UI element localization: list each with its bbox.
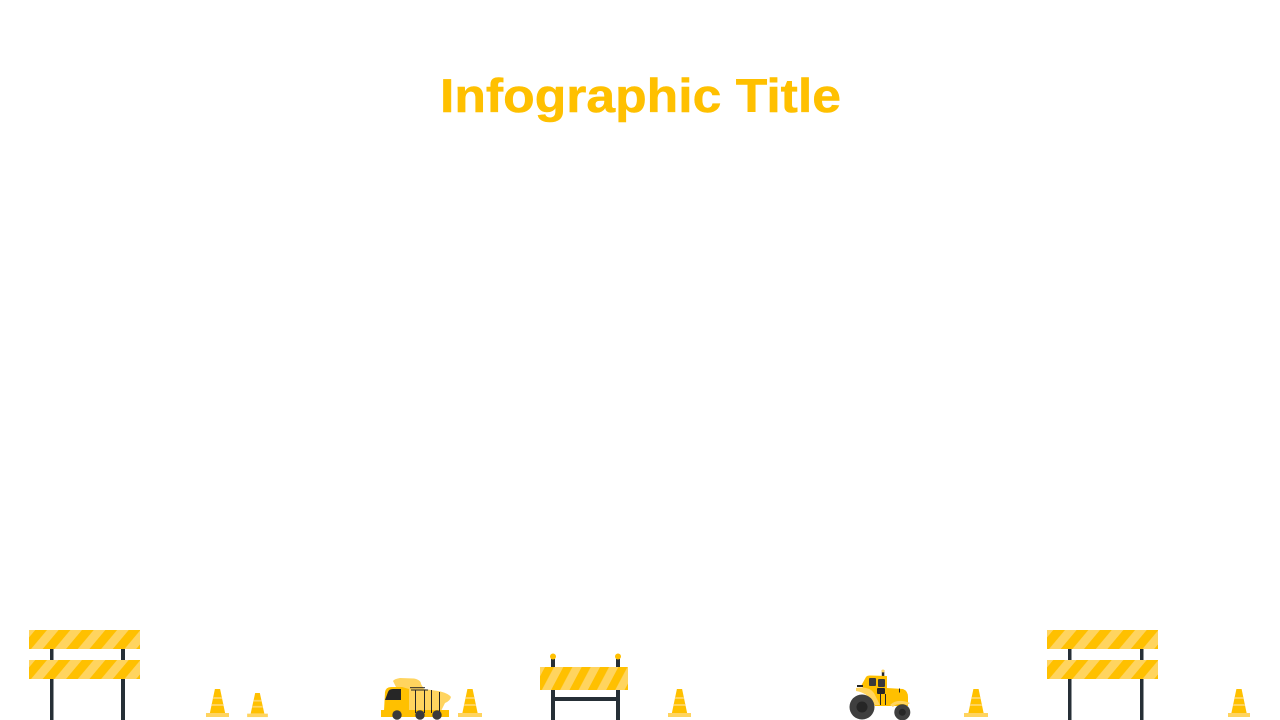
icon: double road barrier right xyxy=(1047,630,1158,720)
icon: traffic cone 3 xyxy=(458,689,482,717)
icon: traffic cone 5 xyxy=(964,689,988,717)
icon: double road barrier left xyxy=(29,630,140,720)
title: Infographic Title xyxy=(440,69,841,122)
icon: dump truck xyxy=(381,678,451,720)
icon: traffic cone 1 xyxy=(206,689,229,717)
icon: traffic cone 6 xyxy=(1228,689,1250,717)
icon: traffic cone 4 xyxy=(668,689,691,717)
icon: tractor xyxy=(850,670,910,720)
icon: traffic cone 2 xyxy=(247,693,268,717)
icon: center road barrier xyxy=(540,654,628,720)
